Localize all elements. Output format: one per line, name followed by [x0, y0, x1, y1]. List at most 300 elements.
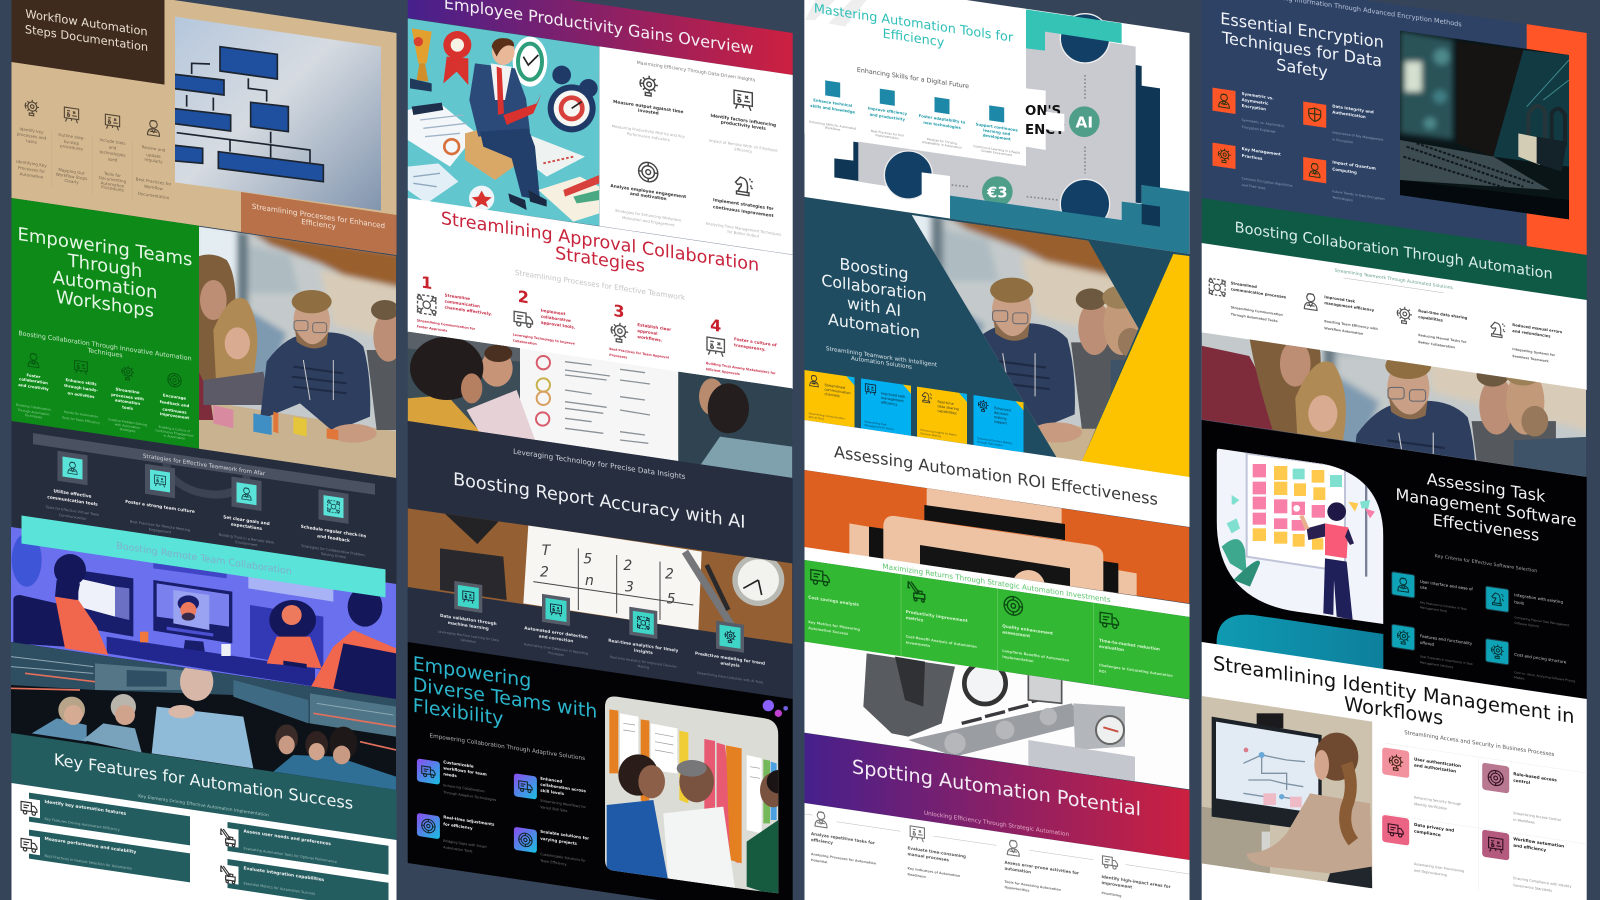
heading: Workshops [56, 287, 154, 322]
feature: customizable: Through Adaptive Technologies [442, 790, 496, 802]
icon [934, 97, 950, 114]
step: include: Include tools [99, 137, 126, 146]
capability: predictive modeling: Streamlining Data Collection with AI Tools [697, 671, 764, 685]
capability: predictive modeling: analysis [720, 660, 740, 668]
slide: boosting collaboration with AI automation [804, 197, 1190, 477]
criterion: cost: Cost and pricing structure [1514, 652, 1567, 665]
criterion: integration: Comparing Popular Task Management [1514, 615, 1570, 627]
step title [1004, 839, 1080, 882]
step title: Assess error-prone activities for [1005, 860, 1080, 876]
decorative dots [763, 700, 788, 717]
image: AI poster graphic: AI [1076, 113, 1093, 131]
feature: customizable [417, 755, 496, 802]
panel: navy and orange base [1202, 0, 1587, 255]
heading: Mastering Automation Tools for [814, 1, 1014, 46]
heading: Diverse Teams with [413, 673, 597, 723]
skill: adaptability [919, 95, 966, 150]
item: goals: Environment [235, 540, 258, 548]
image: AI team photo [10, 640, 397, 793]
item: enhance skills: Hands-On Automation [64, 410, 98, 419]
column 4 slides [1202, 0, 1587, 900]
panel: brown title block [12, 0, 164, 85]
column 1 slides [11, 0, 396, 900]
icon: person [148, 120, 160, 136]
subheading: Leveraging Technology for Precise Data Insights [513, 447, 686, 481]
slide: streamlining identity management [1200, 642, 1587, 900]
card 3: Decision-Making [920, 431, 941, 438]
item: errors [1491, 319, 1563, 365]
step 4: Building Trust Among Stakeholders for [706, 361, 776, 376]
slide: boosting remote team collaboration [10, 421, 397, 703]
panel: rust footer [241, 192, 396, 255]
number: 2 [518, 287, 529, 307]
criterion: integration: Integration with existing [1514, 592, 1563, 605]
item: encourage: Building a Culture of [159, 425, 191, 434]
card 4: decision- [994, 411, 1010, 417]
metric: cost savings: Key Metrics for Measuring [808, 620, 860, 632]
card 1: channels [824, 392, 840, 398]
step 4: transparency. [734, 342, 766, 352]
heading: Boosting [840, 254, 908, 283]
slide: mastering automation tools [804, 0, 1190, 255]
metric: implement strategies: continuous improvement [713, 204, 774, 219]
skill: adaptability: Foster adaptability to [919, 113, 966, 125]
item: errors: Seamless Teamwork [1512, 354, 1549, 363]
icon [811, 570, 829, 586]
step: review: Documentation [138, 191, 170, 200]
step 3: approval [637, 328, 658, 336]
image: team at planning wall [603, 693, 790, 897]
subheading: Empowering Collaboration Through Adaptive Solutions [430, 733, 585, 762]
metric: identify factors: Impact of Remote Work on Employee [709, 139, 778, 153]
panel: white features area [12, 783, 396, 900]
criterion: cost [1486, 639, 1575, 688]
icon [68, 462, 77, 475]
image: productivity illustration [407, 17, 601, 230]
subheading: Unlocking Efficiency Through Strategic Automation [924, 811, 1069, 838]
card 4: Enhancing Decision-Making [978, 436, 1012, 445]
step 1: channels effectively. [445, 304, 492, 317]
icon [907, 581, 925, 602]
metric: time to market: Time-to-market reduction [1099, 638, 1160, 652]
panel: tan background [12, 0, 396, 255]
icon [1309, 163, 1320, 178]
technique: quantum computing: Impact of Quantum [1332, 159, 1376, 171]
item: encourage: continuous [162, 406, 187, 415]
image: machine inspection illustration [802, 640, 1192, 793]
icon [514, 311, 532, 328]
footer text: Streamlining Processes for Enhanced [252, 202, 385, 230]
step: outline: Outline step- [58, 132, 85, 141]
criterion: features [1392, 624, 1473, 672]
metric: measure output [612, 70, 686, 145]
step title [1102, 856, 1172, 895]
skill: continuous learning: development [983, 132, 1011, 142]
icon [1007, 840, 1019, 856]
feature: authentication: User authentication [1414, 756, 1461, 768]
item: foster collaboration: and creativity [18, 382, 49, 392]
icon [825, 80, 840, 98]
capability: real-time analytics [608, 604, 679, 674]
item: culture: Best Practices for Remote Meeting [130, 520, 190, 532]
item: streamline: Streamline [116, 386, 140, 395]
slide: spotting automation potential [802, 640, 1192, 900]
item: encourage: Encourage [163, 392, 186, 401]
heading: Automation [828, 310, 920, 342]
icon [519, 832, 532, 848]
technique: symmetric: Encryption [1242, 103, 1266, 112]
item: communication: Through Automated Tasks [1231, 312, 1278, 323]
metric: identify factors: Identify factors influencing [710, 113, 776, 129]
skill: continuous learning: learning and [983, 127, 1010, 136]
feature: measure: Measure performance and scalability [45, 836, 136, 855]
step: include: technologies [99, 149, 126, 158]
slide: workflow automation steps documentation [12, 0, 396, 255]
panel: green ROI metrics [804, 547, 1190, 699]
card 1: Streamlining Communication [808, 411, 845, 421]
metric: productivity: metrics [906, 615, 924, 623]
feature: authentication: Enhancing Security through [1414, 795, 1461, 806]
item: streamline: tools [122, 404, 134, 411]
icon [1218, 148, 1231, 163]
heading: Assessing Task [1427, 469, 1546, 506]
card 2: Improved task [881, 391, 905, 399]
icon [1309, 107, 1321, 122]
step: repetitive tasks: efficiency [811, 837, 833, 845]
header bar [33, 433, 375, 495]
number: 3 [613, 301, 625, 322]
icon [550, 604, 562, 617]
feature: workflow automation [1482, 830, 1571, 896]
step: include: Tools for [103, 171, 121, 178]
heading: Workflow Automation [25, 7, 148, 39]
feature: evaluate: Essential Metrics for Automation Success [244, 881, 315, 896]
item: task management: Improved task [1324, 294, 1356, 304]
feature: real-time adjustments [417, 810, 495, 857]
capability: real-time analytics: Real-time Analytics for Improved Decision [610, 655, 677, 669]
icon [28, 353, 39, 368]
skill: efficiency: Improve efficiency [868, 105, 907, 116]
icon [1209, 278, 1225, 296]
icon [220, 828, 235, 847]
item: encourage: improvement [160, 411, 189, 420]
skill: technical: Enhance technical [813, 97, 852, 108]
feature: scalable solutions: varying projects [540, 836, 578, 846]
text layer: heading and skills [809, 1, 1020, 158]
panel: dark title band [408, 421, 793, 699]
technique: symmetric: Symmetric vs. [1242, 91, 1274, 101]
feature: customizable: needs [443, 771, 457, 778]
step 3: Establish clear [637, 322, 672, 332]
icon [1397, 306, 1412, 325]
feature: enhanced collaboration: skill levels [540, 788, 565, 796]
image: handwritten report on desk [407, 507, 793, 647]
step: review: update [146, 152, 161, 159]
criterion: cost: Cost vs. Value: Analyzing Software Pricing [1514, 670, 1575, 683]
item: errors: Reduced manual errors [1512, 322, 1563, 334]
capability: real-time analytics: insights [634, 647, 653, 655]
feature: privacy: compliance [1414, 828, 1441, 837]
icon [1004, 595, 1022, 616]
item: encourage [155, 371, 194, 442]
step 1: Faster Approvals [417, 324, 447, 333]
feature: assess: Assess user needs and preferences [244, 828, 331, 847]
item: culture: Foster a strong team culture [125, 499, 195, 515]
step: time consuming: Evaluate time-consuming [908, 845, 966, 859]
icon [1491, 322, 1505, 338]
capability: predictive modeling [695, 618, 765, 685]
panel: black text block [1202, 420, 1587, 699]
capability: real-time analytics: Real-time analytics for timely [608, 638, 679, 653]
icon [242, 487, 251, 500]
step: include: Automation [101, 180, 125, 189]
step: review: Review and [142, 144, 166, 153]
image: AI poster graphic: ON'S [1025, 104, 1061, 119]
item: streamline: Creative Problem-Solving [108, 417, 147, 427]
feature: identify: Identify key automation features [45, 799, 127, 817]
skill: technical [809, 78, 856, 134]
icon [1398, 577, 1409, 592]
heading: Collaboration [821, 271, 927, 305]
step: repetitive tasks [811, 810, 877, 872]
feature: workflow automation: Governance Standards [1513, 883, 1552, 893]
step 2: Leveraging Technology to Improve [513, 333, 576, 346]
step: repetitive tasks: Potential [811, 858, 827, 864]
feature: measure [21, 828, 190, 882]
icon [122, 365, 134, 381]
item: foster collaboration: Boosting Collaboration [16, 403, 51, 412]
metric: identify factors [709, 86, 778, 158]
step: include: used [108, 156, 118, 163]
icon [1219, 93, 1229, 108]
icon [640, 74, 658, 97]
skill: efficiency: Implementation [875, 133, 899, 141]
item: foster collaboration: collaboration [19, 376, 48, 385]
subheading: Enhancing Skills for a Digital Future [857, 67, 969, 90]
icon [1488, 769, 1503, 787]
card 2: Management for Teams [865, 423, 894, 431]
metric: time to market: Challenges in Calculating Automation [1099, 663, 1173, 678]
icon [637, 616, 649, 630]
metric: measure output: invested [638, 108, 659, 117]
metric: productivity: Investments [906, 640, 930, 648]
item: enhance skills: Tools for Team Efficiency [61, 415, 100, 425]
slide: key features for automation success [10, 640, 397, 900]
technique: quantum computing: Computing [1332, 166, 1357, 175]
step: identify: Processes for [18, 165, 45, 174]
item: foster collaboration: Through Automation [17, 408, 49, 417]
card 1: Streamlined [824, 383, 845, 390]
item: streamline: Strategies [120, 427, 136, 433]
item: tools: Communication [59, 513, 86, 521]
capability: data validation: machine learning [448, 620, 489, 631]
metric: time to market [1099, 612, 1173, 684]
card 2: Streamlining Task [865, 419, 887, 427]
skill: technical: skills and knowledge [810, 103, 855, 115]
feature: evaluate: Evaluate integration capabilities [244, 865, 325, 883]
card 2: efficiency [881, 400, 897, 407]
slide: employee productivity gains overview [407, 0, 793, 255]
icon [21, 801, 37, 816]
item: task management: Boosting Team Efficiency with [1324, 319, 1379, 331]
heading: Effectiveness [1433, 510, 1539, 545]
heading: Streamlining Approval Collaboration [441, 209, 759, 276]
step: outline: by-step [64, 139, 80, 146]
step 3 [609, 300, 672, 366]
criterion: features: Management Solutions [1420, 660, 1454, 669]
subheading: Techniques [87, 347, 122, 359]
criterion: UI: Management Tools [1420, 605, 1448, 613]
icon [736, 176, 753, 196]
feature: assess: Evaluating Automation Tools for Optimal Performance [244, 846, 337, 864]
icon [519, 781, 532, 793]
metric: productivity [906, 581, 977, 655]
item: foster collaboration: Foster [27, 372, 41, 379]
technique: data integrity: Importance of Key Management [1332, 130, 1384, 142]
item: task management: Workflow Automation [1324, 326, 1364, 336]
capability: error detection: Processes [548, 651, 564, 657]
item: data sharing: Real-time data sharing [1418, 308, 1468, 320]
capability: error detection: Automating Error Detection in Reporting [524, 642, 588, 656]
item: streamline: processes with [111, 392, 144, 402]
slide: essential encryption techniques [1202, 0, 1587, 255]
criterion: UI: Key Features to Consider in Task [1420, 600, 1467, 611]
slide: boosting collaboration through automation [1202, 198, 1587, 476]
feature: customizable: Enhancing Collaboration [443, 783, 485, 793]
icon [168, 372, 181, 388]
feature: enhanced collaboration: collaboration across [540, 782, 587, 793]
item: culture: Engagement [149, 527, 172, 535]
item: enhance skills: Enhance skills [65, 377, 97, 387]
metric: measure output: Performance Indicators [627, 132, 670, 142]
feature: authentication: Identity Verification [1414, 802, 1447, 811]
item: check-ins: Schedule regular check-ins [301, 524, 367, 540]
skill: technical: Workflows [825, 126, 841, 132]
image: meeting photo with documents [407, 330, 793, 480]
item: tools: Tools for Effective Virtual Team [45, 505, 100, 517]
metric: quality: Quality enhancement [1002, 623, 1053, 636]
subheading: Streamlining Teamwork Through Automated Solutions [1335, 268, 1454, 291]
metric: quality: Long-Term Benefits of Automation [1002, 649, 1070, 663]
slide: empowering teams through automation workshops [12, 198, 396, 478]
icon [880, 89, 895, 106]
skill: adaptability: Adaptability in Automation [922, 140, 962, 150]
image: handwritten report on desk: 5 [583, 551, 592, 567]
image: team photo in triangle [912, 215, 1190, 477]
feature: privacy: and Deprovisioning [1414, 868, 1447, 877]
panel: white base [804, 0, 1190, 255]
step: include: and [109, 144, 117, 151]
metric: implement strategies: Analyzing Time Management Techniques [706, 222, 781, 237]
step: time consuming: Readiness [908, 872, 926, 879]
image: team photo band [1202, 332, 1586, 476]
step: repetitive tasks: Analyze repetitive tasks for [811, 831, 876, 846]
number: 4 [710, 315, 721, 336]
step: outline: Workflow Steps [56, 172, 87, 181]
metric: quality [1002, 595, 1070, 669]
icon [75, 360, 87, 375]
step title: improvement [1102, 880, 1132, 890]
technique: key management: and Their Uses [1242, 183, 1266, 190]
step 1 [417, 272, 492, 340]
icon [1489, 837, 1503, 854]
card 4: Enhanced [994, 406, 1011, 413]
column 3 slides [804, 0, 1190, 900]
image: handwritten report on desk: T [542, 543, 552, 559]
card 1 [804, 370, 854, 427]
feature: enhanced collaboration: Varied Skill Sets [540, 805, 568, 813]
criterion: integration: tools [1514, 599, 1524, 606]
heading: Spotting Automation Potential [852, 755, 1141, 821]
feature: privacy: Data privacy and [1414, 822, 1454, 833]
icon [989, 105, 1004, 123]
panel: teal heading [12, 733, 396, 840]
icon [422, 766, 435, 778]
feature: workflow automation: and efficiency [1513, 843, 1546, 853]
subheading: Streamlining Access and Security in Business Processes [1404, 730, 1555, 758]
metric: quality: assessment [1002, 629, 1030, 638]
feature: role-based: in Workflows [1513, 818, 1535, 825]
slide: boosting report accuracy with AI [407, 421, 793, 699]
step: time consuming: manual processes [908, 851, 949, 862]
metric: implement strategies: Implement strategies for [713, 197, 774, 212]
panel: dark strategies block [12, 421, 396, 584]
image: orange robot poster [804, 470, 1190, 604]
card 4 [974, 395, 1024, 452]
slide: streamlining approval collaboration strategies [407, 198, 793, 480]
item: encourage: feedback and [160, 399, 189, 408]
criterion: UI: User interface and ease of [1420, 579, 1473, 592]
step title: automation [1005, 866, 1031, 875]
image: task board illustration [1215, 447, 1385, 680]
skill: continuous learning: Continuous Learning in a Rapid [973, 144, 1020, 155]
text block [413, 652, 597, 872]
slide: assessing task management software [1202, 420, 1587, 699]
card 1: communication [824, 387, 851, 395]
step: repetitive tasks: Analyzing Processes for Automation [811, 852, 877, 866]
card 3: capabilities [938, 409, 957, 416]
image: laptop with padlock [1398, 28, 1572, 222]
skill: continuous learning: Support continuous [976, 121, 1018, 133]
image: remote meeting illustration [10, 523, 397, 703]
icon [734, 90, 752, 111]
heading: Assessing Automation ROI Effectiveness [834, 442, 1158, 509]
subheading: Key Elements Driving Effective Automation Implementation [138, 793, 269, 819]
item: encourage: Continuous Engagement [155, 428, 194, 438]
card 1: with AI Tools [808, 415, 825, 421]
card 4: making [994, 415, 1007, 421]
feature: role-based: Streamlining Access Control [1513, 811, 1561, 822]
metric: measure output: Measuring Productivity Metrics and Key [612, 124, 686, 139]
skill: efficiency: Best Practices for Tool [871, 129, 904, 138]
step 3: Processes [609, 353, 627, 360]
item: goals: Set clear goals and [223, 514, 270, 527]
metric: implement strategies [706, 172, 781, 242]
icon: board [105, 114, 120, 131]
capability: data validation: Validation [460, 638, 476, 644]
slide: assessing automation ROI effectiveness [802, 420, 1192, 699]
banner [22, 515, 386, 597]
criterion: features: User Experience: Importance in Task [1420, 654, 1473, 666]
heading: Streamlining Identity Management in [1213, 652, 1574, 728]
item: task management: management efficiency [1324, 300, 1375, 313]
heading: Flexibility [413, 694, 503, 730]
capability: predictive modeling: Predictive modeling for trend [695, 651, 765, 666]
feature: role-based: control [1513, 778, 1531, 785]
item: streamline: automation [115, 397, 140, 406]
panel: white title band [804, 420, 1190, 527]
technique: key management: Practices [1242, 153, 1263, 161]
